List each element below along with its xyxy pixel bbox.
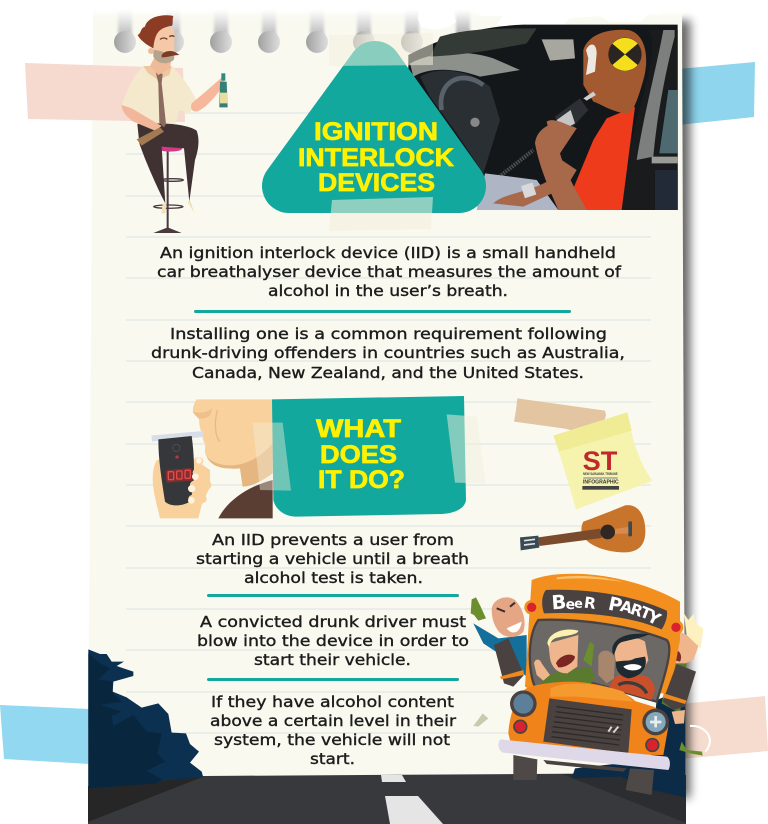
- tape: right: [447, 414, 486, 483]
- arm right with bottle: [191, 77, 225, 112]
- headlights: [510, 690, 537, 717]
- trees left: [88, 649, 203, 788]
- tyres: [513, 755, 537, 780]
- tape: pink right: [680, 696, 768, 759]
- text block: definition: An ignition interlock device (IID) is a small handheld: [160, 244, 616, 262]
- driver: [610, 634, 655, 700]
- heading: ignition interlock devices: IGNITION: [314, 118, 438, 146]
- breathalyser handset: [555, 98, 588, 133]
- sign text: [551, 590, 665, 630]
- heading: ignition interlock devices: INTERLOCK: [298, 144, 454, 172]
- text block: prevents starting: starting a vehicle until a breath: [196, 550, 469, 568]
- sign text: A: [618, 597, 634, 617]
- trousers: [137, 123, 198, 203]
- shirt: [122, 66, 196, 124]
- guitar: [520, 505, 645, 552]
- text block: definition: [157, 244, 622, 300]
- text block: prevents starting: An IID prevents a user from: [212, 531, 454, 549]
- tape: top of triangle: [329, 33, 433, 66]
- sign text: R: [628, 600, 645, 621]
- photo: crash test dummy using a breathalyser: [408, 25, 678, 210]
- man sitting on bar stool: [122, 15, 228, 233]
- text block: alcohol content: If they have alcohol content: [211, 693, 454, 711]
- car interior: [408, 25, 678, 210]
- tape: pink left: [25, 63, 185, 122]
- sign text: Y: [643, 606, 665, 630]
- rear passenger: [598, 651, 615, 683]
- bald man leaning out left: [471, 597, 527, 677]
- heading: ignition interlock devices: [298, 118, 454, 197]
- text block: alcohol content: [210, 693, 457, 768]
- door frame: [623, 30, 678, 210]
- hair: [138, 15, 173, 48]
- road: [88, 773, 686, 824]
- face blowing into breathalyser: [151, 399, 273, 518]
- text block: convicted driver: start their vehicle.: [254, 651, 411, 669]
- text block: where required: drunk-driving offenders in countries such as Australia,: [151, 344, 625, 362]
- brown tape: [514, 398, 606, 437]
- shoulder: [218, 480, 273, 518]
- top lights: [524, 600, 539, 615]
- heading: what does it do?: [316, 415, 405, 494]
- ruled lines: [126, 113, 651, 733]
- grille: [543, 698, 632, 753]
- sign text: P: [606, 594, 624, 617]
- text block: where required: Installing one is a common requirement following: [170, 325, 607, 343]
- text block: prevents starting: [196, 531, 469, 587]
- paper shadow: [674, 20, 690, 798]
- paper sheet: [88, 10, 685, 790]
- text block: definition: alcohol in the user’s breath.: [268, 282, 508, 300]
- text block: convicted driver: blow into the device in order to: [197, 632, 469, 650]
- tape: blue left: [0, 705, 90, 764]
- right mirror and hand: [663, 664, 696, 710]
- neck and head: [150, 57, 172, 75]
- heading: what does it do?: IT DO?: [318, 466, 405, 494]
- red shirt: [573, 107, 635, 210]
- left mirror: [494, 638, 524, 687]
- sign text: e: [565, 597, 576, 613]
- passenger blond: [534, 629, 595, 685]
- text block: prevents starting: alcohol test is taken.: [244, 569, 423, 587]
- heading: what does it do?: WHAT: [316, 415, 401, 443]
- text block: alcohol content: above a certain level in their: [210, 712, 457, 730]
- heading: what does it do?: DOES: [320, 441, 397, 469]
- text block: definition: car breathalyser device that measures the amount of: [157, 263, 622, 281]
- bumper: [498, 739, 670, 770]
- text block: alcohol content: start.: [310, 750, 355, 768]
- hand: [153, 458, 210, 518]
- paper punch holes: [114, 6, 662, 53]
- text block: convicted driver: A convicted drunk driver must: [200, 613, 466, 631]
- crash target: [608, 38, 642, 71]
- sign text: R: [583, 593, 597, 613]
- title triangle panel: [289, 33, 459, 231]
- ST logo: ST: [583, 446, 617, 476]
- tape: left: [253, 423, 291, 491]
- text block: alcohol content: system, the vehicle will not: [214, 731, 450, 749]
- sign text: T: [637, 603, 654, 624]
- device: [151, 431, 203, 442]
- arm left with bottle: [122, 105, 162, 131]
- sign board: [542, 590, 667, 629]
- note: [553, 412, 652, 509]
- bus lower body: [508, 682, 668, 755]
- text block: convicted driver: [197, 613, 469, 669]
- beer party bus: [471, 574, 710, 795]
- sign text: e: [574, 595, 583, 611]
- blond man leaning out right: [660, 613, 703, 713]
- windscreen: [530, 620, 669, 702]
- bus body top: [525, 574, 680, 693]
- face and neck: [193, 399, 273, 487]
- sticky note with ST logo: [514, 398, 652, 509]
- heading: ignition interlock devices: DEVICES: [318, 169, 435, 197]
- ST logo: INFOGRAPHIC: [583, 480, 619, 486]
- text block: where required: Canada, New Zealand, and the United States.: [192, 364, 584, 382]
- tie: [156, 72, 166, 127]
- tape: bottom of triangle: [329, 197, 433, 231]
- ST logo: NEW SARAWAK TRIBUNE: [583, 471, 618, 476]
- fingers: [188, 457, 211, 503]
- text block: where required: [151, 325, 625, 382]
- head: [583, 30, 646, 113]
- stool: [153, 146, 183, 233]
- tape: blue right: [678, 62, 755, 125]
- what does it do panel: [253, 396, 486, 517]
- flying bottles: [679, 742, 703, 756]
- sign text: B: [551, 590, 567, 614]
- ST logo: [582, 446, 619, 490]
- arm: [535, 123, 587, 210]
- trees right: [572, 693, 685, 797]
